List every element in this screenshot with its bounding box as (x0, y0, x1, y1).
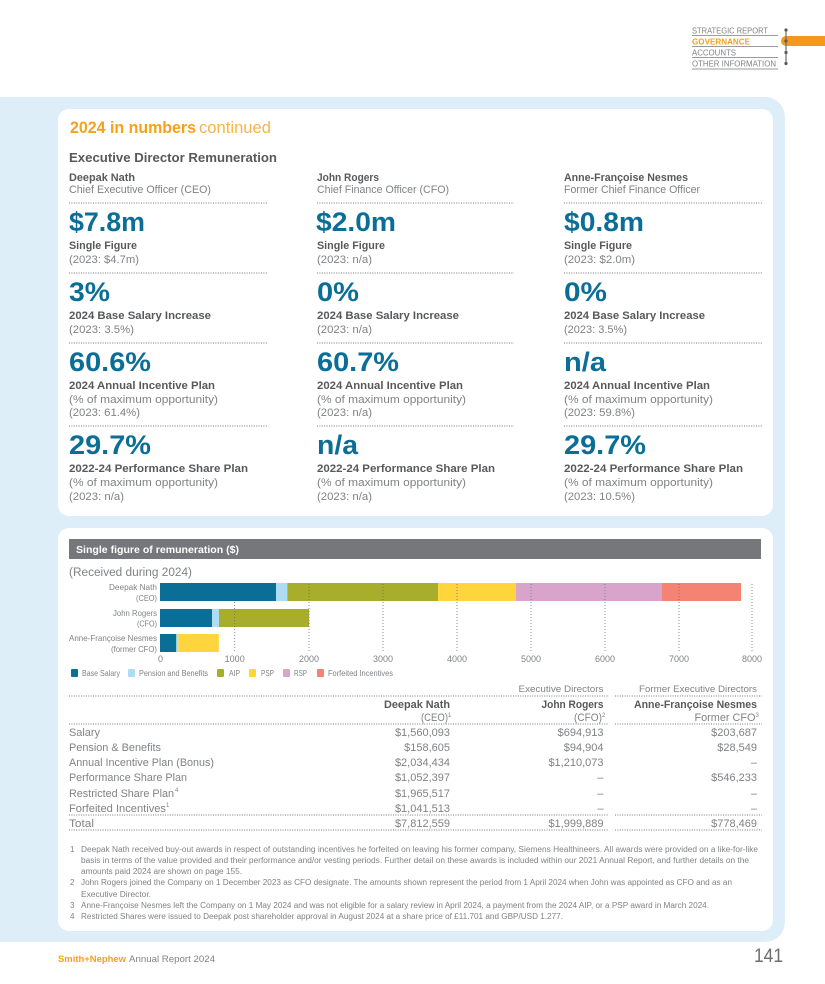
remuneration table: $1,965,517 (395, 788, 450, 800)
footnotes: Restricted Shares were issued to Deepak post shareholder approval in August 2024 at a share price of £11.701 and GBP/USD 1.277. (81, 912, 563, 921)
column: John Rogers (316, 172, 514, 503)
remuneration table: Total (69, 818, 94, 830)
navigation tabs: GOVERNANCE (692, 36, 750, 46)
panel: 2024 in numbers (58, 109, 773, 516)
column: Anne-Françoise Nesmes: 29.7% (564, 430, 646, 460)
remuneration table: (CEO) (421, 712, 448, 724)
remuneration table: $28,549 (717, 742, 757, 754)
stacked bar chart: Anne-Françoise Nesmes (69, 633, 157, 643)
remuneration table: – (597, 803, 604, 815)
column: Deepak Nath: 2022-24 Performance Share Plan (69, 463, 248, 475)
chart legend (71, 669, 393, 678)
remuneration table: $203,687 (711, 727, 757, 739)
remuneration table: Performance Share Plan (69, 772, 187, 784)
stacked bar chart: 5000 (521, 654, 541, 664)
chart legend: Base Salary (82, 669, 120, 678)
column: Anne-Françoise Nesmes: (% of maximum opportunity) (564, 394, 713, 406)
footnotes: amounts paid 2024 are shown on page 155. (81, 867, 242, 876)
column: Anne-Françoise Nesmes: (2023: 3.5%) (564, 324, 627, 336)
footer: report name: Smith+Nephew (58, 954, 127, 965)
footer: report name (58, 954, 215, 965)
title: continued (199, 118, 271, 137)
column: Deepak Nath: 29.7% (69, 430, 151, 460)
panel: single figure of remuneration (58, 528, 773, 931)
column: Anne-Françoise Nesmes: 2024 Annual Incentive Plan (564, 380, 710, 392)
column: Anne-Françoise Nesmes: (2023: 10.5%) (564, 491, 635, 503)
column: John Rogers: 2022-24 Performance Share Plan (317, 463, 495, 475)
chart legend: RSP (294, 669, 307, 678)
footnotes: basis in terms of the value provided and their performance and/or vesting periods. Further detail on these awards is included within our 2021 Annual Report, and further details on the (81, 856, 750, 865)
remuneration table: John Rogers (542, 699, 604, 711)
remuneration table: $1,041,513 (395, 803, 450, 815)
stacked bar chart: 6000 (595, 654, 615, 664)
remuneration table: – (751, 803, 758, 815)
column: Deepak Nath: (2023: n/a) (69, 491, 124, 503)
section header bar (69, 539, 761, 559)
stacked bar chart: 4000 (447, 654, 467, 664)
remuneration table: $7,812,559 (395, 818, 450, 830)
remuneration table: (CFO) (574, 712, 602, 724)
remuneration table: $1,210,073 (548, 757, 604, 769)
column: Anne-Françoise Nesmes: $0.8m (564, 207, 644, 237)
column: Anne-Françoise Nesmes: Anne-Françoise Nesmes (564, 172, 688, 184)
remuneration table: 4 (175, 788, 179, 794)
column: John Rogers: (2023: n/a) (317, 324, 372, 336)
column: Deepak Nath: (2023: 3.5%) (69, 324, 134, 336)
footnotes: 2 (70, 878, 75, 887)
remuneration table: Executive Directors (518, 684, 604, 695)
column: Anne-Françoise Nesmes (564, 172, 762, 503)
column: John Rogers: (2023: n/a) (317, 254, 372, 266)
remuneration table: Pension & Benefits (69, 742, 161, 754)
column: Deepak Nath: 2024 Base Salary Increase (69, 310, 211, 322)
footnotes: Anne-Françoise Nesmes left the Company on 1 May 2024 and was not eligible for a salary review in April 2024, a payment from the 2024 AIP, or a PSP award in March 2024. (81, 901, 709, 910)
remuneration table: Annual Incentive Plan (Bonus) (69, 757, 214, 769)
column: Deepak Nath: (2023: $4.7m) (69, 254, 139, 266)
chart legend: Pension and Benefits (139, 669, 208, 678)
footnotes: John Rogers joined the Company on 1 December 2023 as CFO designate. The amounts shown represent the period from 1 April 2024 when John was appointed as CFO and as an (81, 878, 732, 887)
column: John Rogers: $2.0m (316, 207, 396, 237)
column: Deepak Nath: 3% (69, 277, 110, 307)
column: Deepak Nath: Deepak Nath (69, 172, 135, 184)
column: John Rogers: 60.7% (317, 347, 399, 377)
column: John Rogers: Single Figure (317, 240, 385, 252)
remuneration table: $94,904 (564, 742, 604, 754)
column: John Rogers: n/a (317, 430, 359, 460)
column: John Rogers: (% of maximum opportunity) (317, 394, 466, 406)
column: Deepak Nath: (% of maximum opportunity) (69, 394, 218, 406)
remuneration table: – (597, 772, 604, 784)
column: John Rogers: 2024 Base Salary Increase (317, 310, 459, 322)
title (70, 118, 271, 137)
remuneration table: $1,052,397 (395, 772, 450, 784)
stacked bar chart: (CFO) (137, 618, 157, 628)
footnotes (70, 845, 759, 921)
footer: page number: 141 (754, 946, 783, 967)
footnotes: 4 (70, 912, 75, 921)
navigation tabs: ACCOUNTS (692, 48, 736, 58)
remuneration table: $546,233 (711, 772, 757, 784)
remuneration table: $158,605 (404, 742, 450, 754)
column: Anne-Françoise Nesmes: (2023: 59.8%) (564, 407, 635, 419)
column: Anne-Françoise Nesmes: 0% (564, 277, 607, 307)
remuneration table: $1,999,889 (548, 818, 604, 830)
stacked bar chart: (CEO) (136, 593, 157, 603)
stacked bar chart: 2000 (299, 654, 319, 664)
title: 2024 in numbers (70, 118, 196, 137)
chart legend: Forfeited Incentives (328, 669, 393, 678)
navigation tabs (692, 26, 825, 69)
remuneration table: $778,469 (711, 818, 757, 830)
remuneration table: $1,560,093 (395, 727, 450, 739)
column: Anne-Françoise Nesmes: Former Chief Finance Officer (564, 184, 700, 196)
stacked bar chart: 7000 (669, 654, 689, 664)
column: Deepak Nath (69, 172, 267, 503)
column: Anne-Françoise Nesmes: 2024 Base Salary Increase (564, 310, 705, 322)
chart legend: AIP (229, 669, 240, 678)
stacked bar chart (69, 582, 762, 664)
remuneration table: Former CFO (694, 712, 756, 724)
section header bar: Single figure of remuneration ($) (76, 544, 239, 556)
remuneration table: 1 (166, 803, 170, 809)
footnotes: Deepak Nath received buy-out awards in respect of outstanding incentives he forfeited on leaving his former company, Siemens Healthineers. All awards were provided on a like-for-like (81, 845, 759, 854)
column: John Rogers: 2024 Annual Incentive Plan (317, 380, 463, 392)
remuneration table: 2 (602, 713, 606, 719)
column: Anne-Françoise Nesmes: (2023: $2.0m) (564, 254, 635, 266)
column: Deepak Nath: $7.8m (69, 207, 145, 237)
footnotes: 1 (70, 845, 75, 854)
stacked bar chart: 1000 (225, 654, 245, 664)
stacked bar chart: 8000 (742, 654, 762, 664)
column: Anne-Françoise Nesmes: Single Figure (564, 240, 632, 252)
remuneration table: – (597, 788, 604, 800)
remuneration table: 1 (448, 713, 452, 719)
remuneration table: Restricted Share Plan (69, 788, 174, 800)
column: Anne-Françoise Nesmes: 2022-24 Performance Share Plan (564, 463, 743, 475)
stacked bar chart: 3000 (373, 654, 393, 664)
chart legend: PSP (261, 669, 274, 678)
footnotes: Executive Director. (81, 890, 151, 899)
column: John Rogers: (2023: n/a) (317, 407, 372, 419)
column: Deepak Nath: Chief Executive Officer (CEO) (69, 184, 211, 196)
column: Deepak Nath: Single Figure (69, 240, 137, 252)
remuneration table: $694,913 (558, 727, 604, 739)
remuneration table: Forfeited Incentives (69, 803, 166, 815)
column: Deepak Nath: 60.6% (69, 347, 151, 377)
column: Anne-Françoise Nesmes: (% of maximum opportunity) (564, 477, 713, 489)
remuneration table: 3 (756, 713, 760, 719)
remuneration table: Anne-Françoise Nesmes (634, 699, 757, 711)
column: John Rogers: 0% (317, 277, 359, 307)
footer: report name: Annual Report 2024 (129, 954, 215, 965)
column: Deepak Nath: 2024 Annual Incentive Plan (69, 380, 215, 392)
chart subtitle: (Received during 2024) (69, 567, 192, 579)
remuneration table: Deepak Nath (384, 699, 450, 711)
stacked bar chart: John Rogers (113, 608, 157, 618)
navigation tabs: OTHER INFORMATION (692, 58, 776, 68)
remuneration table: Salary (69, 727, 100, 739)
stacked bar chart: (former CFO) (111, 644, 157, 654)
column: John Rogers: John Rogers (317, 172, 379, 184)
footnotes: 3 (70, 901, 75, 910)
remuneration table: Former Executive Directors (639, 684, 757, 695)
column: Deepak Nath: (% of maximum opportunity) (69, 477, 218, 489)
remuneration table: – (751, 757, 758, 769)
heading: Executive Director Remuneration (69, 151, 277, 165)
column: John Rogers: Chief Finance Officer (CFO) (317, 184, 449, 196)
column: John Rogers: (2023: n/a) (317, 491, 372, 503)
stacked bar chart: 0 (158, 654, 163, 664)
column: Anne-Françoise Nesmes: n/a (564, 347, 607, 377)
column: John Rogers: (% of maximum opportunity) (317, 477, 466, 489)
remuneration table (69, 684, 762, 830)
navigation tabs: STRATEGIC REPORT (692, 26, 768, 36)
stacked bar chart: Deepak Nath (109, 582, 157, 592)
remuneration table: $2,034,434 (395, 757, 450, 769)
column: Deepak Nath: (2023: 61.4%) (69, 407, 140, 419)
remuneration table: – (751, 788, 758, 800)
